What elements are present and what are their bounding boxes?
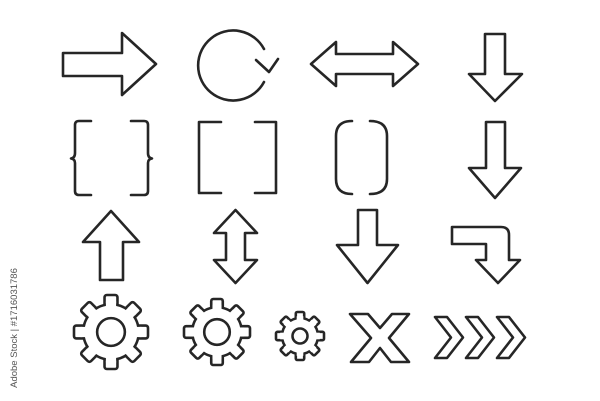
icon: down arrow 2	[469, 122, 521, 198]
icon: gear large	[74, 295, 148, 369]
icon: square brackets	[199, 122, 276, 193]
icon: X	[350, 314, 409, 362]
icon: down arrow 3	[337, 210, 398, 283]
icon: curly braces	[71, 121, 152, 195]
icon: bent arrow	[452, 227, 520, 283]
icon: gear medium	[184, 299, 250, 365]
icon: refresh circle	[198, 31, 278, 101]
icon: gear small	[276, 312, 324, 360]
icon: double arrow	[311, 42, 418, 86]
icon: up-down arrow	[214, 210, 257, 283]
watermark credit text: Adobe Stock | #1716031786	[9, 268, 20, 388]
icon: up arrow	[83, 211, 139, 280]
icon: triple chevrons	[435, 317, 525, 358]
icon: parentheses	[336, 121, 387, 194]
icon: right arrow	[63, 33, 156, 95]
icon: down arrow 1	[469, 34, 522, 101]
